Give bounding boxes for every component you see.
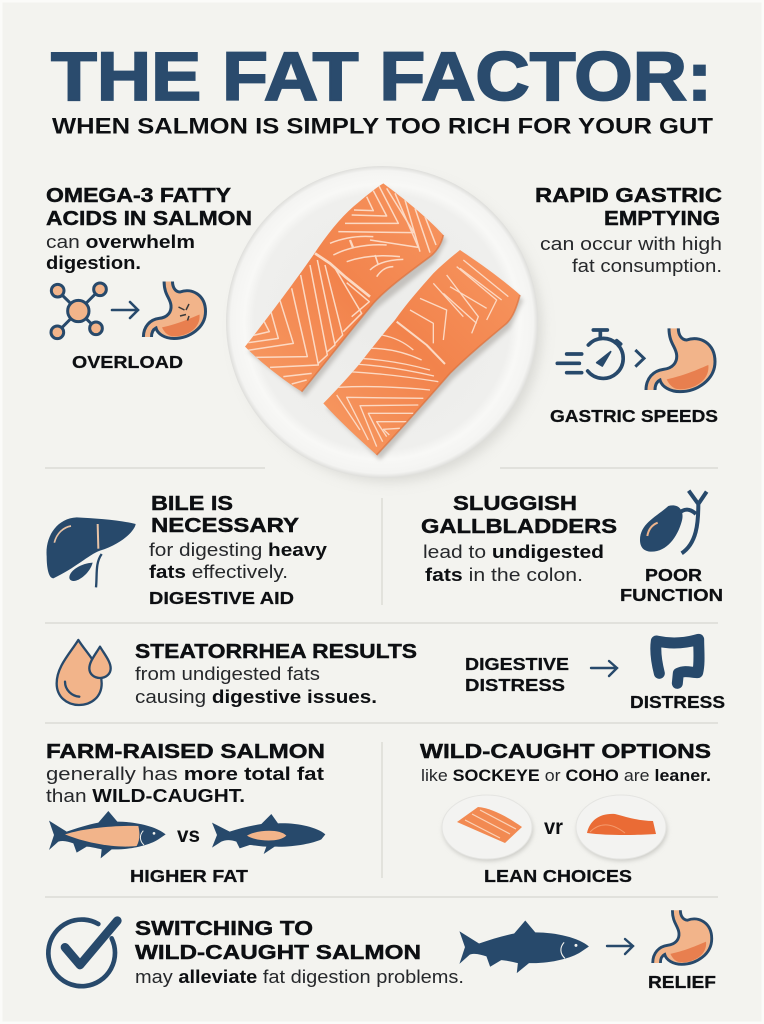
label: RELIEF <box>648 972 716 992</box>
heading: SWITCHING TO <box>135 917 313 940</box>
heading line 2: GALLBLADDERS <box>421 515 617 538</box>
text: like SOCKEYE or COHO are leaner. <box>421 766 711 785</box>
icon: stomach <box>646 328 715 392</box>
text line 2: fats effectively. <box>149 562 288 582</box>
icon: gallbladder <box>640 491 707 553</box>
arrow <box>112 302 138 318</box>
label: GASTRIC SPEEDS <box>550 406 718 426</box>
text: lead to undigested <box>423 542 604 562</box>
arrow <box>607 939 633 954</box>
salmon fillet right <box>323 250 523 460</box>
heading: STEATORRHEA RESULTS <box>135 640 417 663</box>
title: THE FAT FACTOR: <box>51 38 712 115</box>
heading line 2: EMPTYING <box>604 207 720 230</box>
heading: BILE IS <box>151 492 233 515</box>
label: POOR <box>645 565 702 585</box>
icon: plate with lean salmon <box>576 795 667 861</box>
label line 2: DISTRESS <box>465 675 565 695</box>
icon: molecule <box>51 283 106 339</box>
label: HIGHER FAT <box>130 866 248 886</box>
icon: wild fish <box>212 814 325 854</box>
text: for digesting heavy <box>149 540 327 560</box>
arrow <box>591 661 617 676</box>
text line 2: fats in the colon. <box>425 565 583 585</box>
vr: vr <box>544 816 563 839</box>
heading: SLUGGISH <box>453 492 577 515</box>
icon: check <box>48 920 117 986</box>
heading: FARM-RAISED SALMON <box>46 740 325 763</box>
text: can occur with high <box>540 234 722 254</box>
label: DISTRESS <box>630 692 725 712</box>
icon: stomach overload <box>143 282 206 338</box>
icon: liver <box>47 517 136 587</box>
text: may alleviate fat digestion problems. <box>135 967 464 987</box>
panel: steatorrhea <box>57 639 725 712</box>
icon: fat drops <box>57 640 111 705</box>
icon: plate with salmon <box>442 795 533 861</box>
icon: colon <box>656 639 699 683</box>
text: can overwhelm <box>46 232 195 252</box>
icon: farm fish <box>49 811 166 858</box>
label: OVERLOAD <box>72 352 183 372</box>
heading line 2: NECESSARY <box>151 514 299 537</box>
panel: bile <box>47 492 327 608</box>
label: LEAN CHOICES <box>484 866 632 886</box>
icon: stomach relief <box>653 910 712 964</box>
text line 2: than WILD-CAUGHT. <box>46 786 245 806</box>
label: DIGESTIVE AID <box>149 588 294 608</box>
icon: stopwatch <box>557 330 644 378</box>
salmon fillet left <box>245 183 447 397</box>
panel: gastric emptying <box>535 184 722 426</box>
text: generally has more total fat <box>46 764 324 784</box>
panel: omega-3 <box>46 184 252 372</box>
heading: WILD-CAUGHT OPTIONS <box>420 740 711 763</box>
heading: RAPID GASTRIC <box>535 184 722 207</box>
label line 2: FUNCTION <box>620 585 723 605</box>
salmon plate photo <box>226 166 542 482</box>
panel: farm-raised <box>46 740 325 886</box>
panel: wild-caught <box>420 740 711 886</box>
text line 2: fat consumption. <box>572 256 722 276</box>
subtitle: WHEN SALMON IS SIMPLY TOO RICH FOR YOUR GUT <box>52 114 713 138</box>
vs: vs <box>177 824 200 847</box>
text line 2: causing digestive issues. <box>135 687 377 707</box>
icon: fish <box>459 921 589 973</box>
heading line 2: ACIDS IN SALMON <box>46 207 252 230</box>
text: from undigested fats <box>135 664 320 684</box>
panel: gallbladders <box>421 491 723 605</box>
heading: OMEGA-3 FATTY <box>46 184 231 207</box>
panel: switching <box>48 910 716 992</box>
text line 2: digestion. <box>46 253 141 273</box>
label: DIGESTIVE <box>465 654 569 674</box>
heading line 2: WILD-CAUGHT SALMON <box>135 941 421 964</box>
